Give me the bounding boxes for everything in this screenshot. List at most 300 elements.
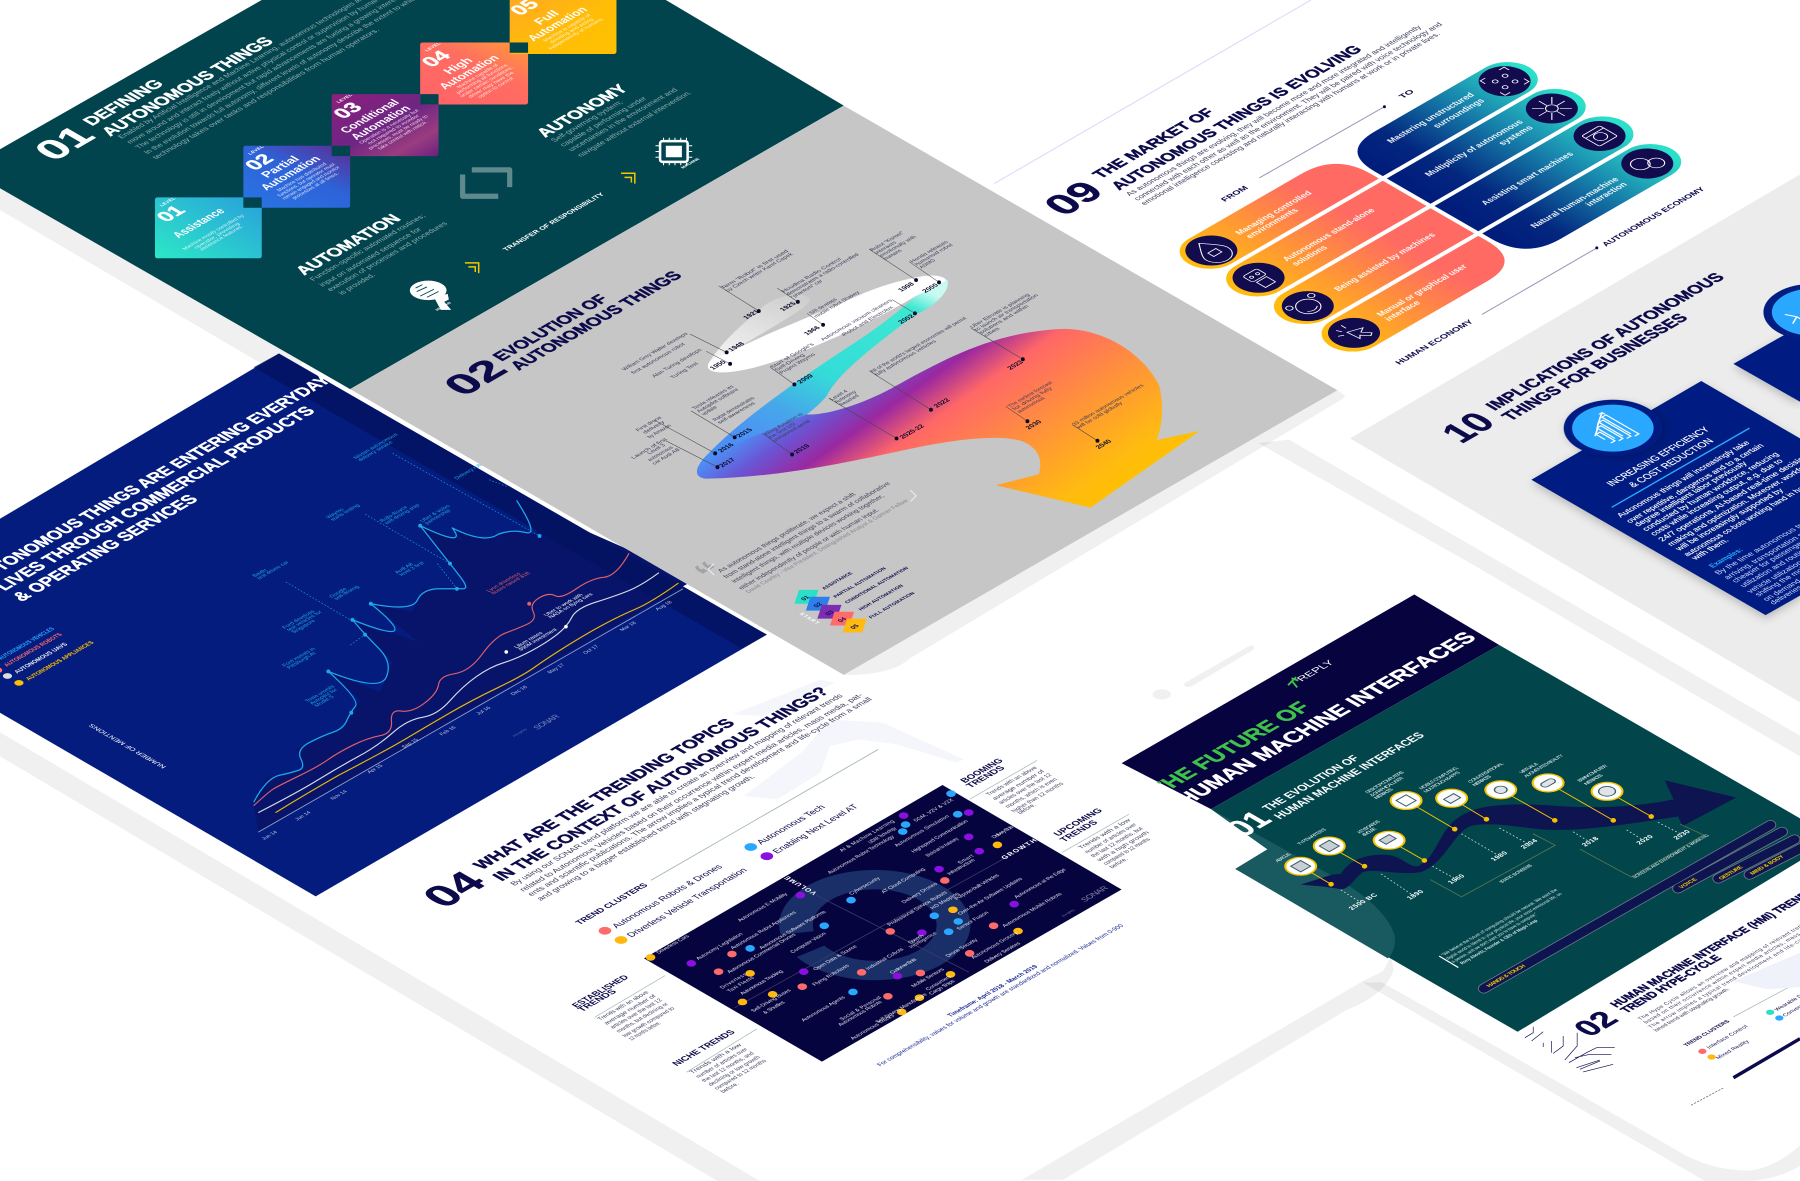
quadrant callouts: average number of (602, 994, 658, 1026)
card body text: costs while increasing output, e.g. due to (1648, 458, 1786, 537)
event annotations: Audi A8 (394, 562, 415, 575)
interface type labels: KEYBOARDS (1356, 819, 1383, 835)
trend labels: AI & Machine Learning (839, 819, 896, 853)
trend labels: Open Data & Source (812, 945, 859, 972)
quadrant callouts (570, 757, 1152, 1094)
event annotations: level 3 first (398, 561, 427, 577)
card: second implication (cropped) (1733, 272, 1800, 402)
interface type labels: VIRTUAL & (1518, 762, 1541, 775)
interface type labels: DESKTOP COMPUTERS (1364, 770, 1407, 795)
automation levels legend: CONDITIONAL AUTOMATION (844, 566, 911, 605)
section intro text: bined trend with stagnating growth. (1653, 987, 1732, 1033)
card body text: over repetitive, dangerous and to a certain (1624, 442, 1766, 524)
trend clusters legend: TREND CLUSTERS (573, 881, 650, 926)
curve: autonomous robots (254, 553, 629, 806)
icon: robot (1222, 257, 1295, 299)
interface icon circles (1279, 770, 1629, 879)
quadrant callouts: NICHE TRENDS (670, 1028, 737, 1067)
title: HUMAN MACHINE INTERFACES (1170, 628, 1482, 808)
timeline of interfaces drawn in zoom space (1274, 753, 1800, 989)
autonomy text block (531, 81, 694, 158)
card examples text: Examples: (1707, 547, 1745, 569)
trend labels: Purpose-built Vehicles (953, 873, 1001, 901)
event annotations: Uber & Volvo (419, 504, 452, 523)
level 03 conditional automation: Automation (347, 103, 414, 142)
trend labels: Driverless Cars (655, 934, 692, 955)
trend labels: Autonomous Simulation (894, 814, 951, 848)
quote: “We believe the future of computing should be natural. We want the (1440, 888, 1560, 957)
automation levels legend (794, 566, 917, 632)
level 02 partial automation (240, 145, 350, 208)
years on the timeline: 2004 (1520, 838, 1540, 850)
axis labels: GROWTH (1000, 838, 1039, 861)
section 01 number: 01 (25, 121, 104, 166)
trend clusters legend: Autonomous Tech (754, 803, 827, 846)
icon: human head (410, 281, 452, 312)
red and white annotations: Lyon driverless (486, 572, 523, 593)
interface type labels: AUGMENTED REALITY (1523, 753, 1566, 779)
faint arrow (1733, 953, 1800, 989)
level 04 high automation: under certain conditions; (459, 66, 515, 99)
timeline event descriptions: by Czech writer Karel Capek (724, 252, 795, 293)
level 01 assistance: 01 (152, 203, 191, 225)
timeline years (709, 282, 1114, 469)
quote: either independently of people or with human input. (737, 508, 882, 591)
lighter green device corner overlay (1211, 809, 1395, 958)
timeline years: 2020-22 (899, 424, 927, 440)
event annotations: Singapore (290, 619, 317, 635)
quadrant callouts: compared to 12 months (1102, 837, 1152, 866)
trend labels: Autonomous Agents (800, 995, 847, 1023)
trend labels: Driverless (719, 973, 749, 990)
automation levels legend: 01 (800, 595, 812, 602)
automation text block: execution of processes and procedures (325, 220, 450, 293)
time axis: Mar 18 (619, 621, 638, 632)
timeline event descriptions: Launch of first (630, 437, 670, 460)
icon: rising bars (1543, 388, 1682, 468)
timeline years: 2022 (933, 398, 952, 409)
timeline event descriptions: Level 3 (646, 443, 667, 455)
human economy to autonomous economy arrow: AUTONOMOUS ECONOMY (1600, 186, 1708, 248)
level 04 high automation: 04 (417, 48, 456, 70)
timeline event descriptions: emotionally with (878, 235, 918, 258)
interface icon glyphs (1291, 778, 1619, 872)
interface type labels: BRAIN-COMPUTER (1576, 764, 1610, 783)
timeline event descriptions: fully autonomous vehicles (874, 339, 939, 377)
era labels (1498, 833, 1711, 884)
trend labels: Smart (957, 854, 976, 865)
blue trend markers (745, 790, 963, 995)
timeline event descriptions: for driving fully (1011, 386, 1055, 411)
circuit decoration (1525, 1027, 1615, 1072)
event annotations: Baidu (251, 568, 269, 578)
level 02 partial automation: 02 (240, 151, 279, 174)
level 01 assistance: Assistance (169, 206, 228, 240)
timeline years: 2040 (1095, 439, 1114, 450)
section 10 heading: IMPLICATIONS OF AUTONOMOUS (1481, 270, 1729, 413)
timeline years: 2016 (717, 442, 736, 454)
trend labels: Professional Service Robots (886, 891, 949, 927)
trend clusters legend: Driverless Vehicle Transportation (624, 867, 749, 939)
quadrant callouts: Trends with an above (596, 990, 651, 1022)
timeline event descriptions: by Amazon (646, 424, 673, 439)
event annotations (251, 433, 491, 708)
level 04 high automation: option to control (477, 77, 516, 99)
section 09 heading: AUTONOMOUS THINGS IS EVOLVING (1107, 43, 1366, 193)
FROM to TO arrow (1219, 88, 1416, 203)
autonomy text block: AUTONOMY (531, 81, 633, 140)
from pill labels: Being assisted by machines (1332, 231, 1438, 293)
timeline event descriptions: Houdina Radio Control (781, 257, 843, 294)
quadrant callouts: articles over the last 12 (609, 997, 665, 1030)
automation levels legend: PARTIAL AUTOMATION (832, 567, 888, 599)
timeline years: 1948 (727, 341, 747, 353)
level 03 conditional automation: Conditional (337, 97, 403, 135)
section 02 number: 02 (1566, 1006, 1626, 1041)
timeline leader lines (654, 249, 1097, 467)
section 04 intro text: related to Autonomous Vehicles based on their occurrence within expert media articles, mass media, pat- (517, 692, 865, 893)
timeline event descriptions: cities (983, 327, 1002, 338)
event annotations: Ford develops (281, 609, 317, 630)
section 10 number: 10 (1433, 407, 1505, 449)
event annotations: Google (328, 587, 349, 599)
level 01 assistance: LEVEL (158, 196, 177, 207)
level 03 conditional automation: LEVEL (335, 93, 354, 104)
to pill labels: systems (1496, 124, 1535, 147)
automation text block (290, 211, 450, 296)
section 10 heading: THINGS FOR BUSINESSES (1497, 310, 1692, 423)
from pill labels: solutions (1289, 244, 1330, 267)
timeline years: 2002 (897, 314, 917, 325)
trend labels: Autonomous Software Platforms (758, 910, 828, 950)
section 01 heading: HUMAN MACHINE INTERFACES (1270, 730, 1428, 821)
to pill labels: Natural human-machine (1528, 176, 1621, 229)
timeline event descriptions: solutions and within (978, 304, 1031, 335)
event annotations: delivery service (357, 440, 395, 462)
curve: autonomous UAVs (258, 573, 659, 813)
trend labels: 5GM, V2V & V2X (913, 798, 956, 823)
panel: HMI trend hype-cycle (1525, 890, 1800, 1105)
time axis: May 17 (546, 663, 567, 675)
automation levels legend: START (797, 612, 821, 626)
quadrant callouts: TRENDS (964, 764, 1007, 789)
trend labels: Infrastructure (946, 858, 977, 876)
quadrant callouts: TRENDS (575, 988, 619, 1013)
level 01 assistance (152, 196, 262, 258)
level 04 high automation: LEVEL (424, 42, 442, 52)
section 02 number: 02 (434, 354, 517, 402)
card: increasing efficiency and cost reduction (1531, 381, 1800, 615)
trend labels: Delivery Drones (901, 882, 940, 904)
purple trend markers (687, 809, 1019, 979)
evolution ribbon arrow (697, 276, 1200, 508)
level 02 partial automation: remain engaged and monitor (281, 165, 342, 201)
quadrant callouts: UPCOMING (1051, 807, 1105, 838)
timeline event descriptions: iRobot and Electrolux (840, 305, 895, 337)
timeline event descriptions: Start of Google's (769, 342, 816, 369)
red and white annotations: Lilium raises (513, 631, 545, 649)
Sonar credit: Insights (512, 728, 528, 737)
curve: autonomous appliances (276, 583, 678, 813)
trend labels: Customer Bots (889, 958, 919, 975)
FROM to TO arrow: FROM (1219, 185, 1251, 203)
section 04 intro text: By using our SONAR trend platform we are able to create an overview and mapping of relevant trends (508, 693, 845, 887)
era labels: STATIC SCREENS (1498, 864, 1534, 884)
timeline years: 1950 (709, 360, 728, 371)
human economy to autonomous economy arrow: HUMAN ECONOMY (1393, 318, 1476, 366)
to pills (1340, 55, 1694, 259)
quadrant callouts: number of articles over (1083, 822, 1139, 855)
years on the timeline (1348, 829, 1692, 911)
autonomy text block: Self-governing system; (548, 99, 625, 143)
chart legend: AUTONOMOUS UAVS (13, 642, 70, 675)
quote: digital world to blend to your physical life, your most emotional life, so (1445, 892, 1564, 961)
hype cycle baseline (1733, 1039, 1800, 1078)
section 01 intro text: technology takes over tasks and responsibilities from human operators. (150, 27, 382, 161)
track labels: MIND & BODY (1749, 855, 1786, 876)
track labels: VOICE (1678, 878, 1699, 890)
quote: a person, and we don't want you to have to compute.” (1450, 912, 1540, 964)
decorative purple rule above section 09 (994, 0, 1311, 184)
section 01 heading: DEFINING (78, 76, 168, 128)
trend labels: Computer Vision (789, 932, 828, 954)
to pill labels (1384, 91, 1629, 229)
timeline event descriptions: ASIMO (918, 258, 938, 270)
from/to pills matrix (1167, 55, 1694, 359)
interface type labels: ABACUS (1274, 852, 1294, 863)
automation text block: Function-specific automated routines; (307, 213, 427, 282)
timeline years: 1966 (803, 325, 822, 337)
icon: transfer brackets (463, 170, 510, 196)
interface type labels: CONVERSATIONAL (1467, 762, 1506, 784)
panel: section 10 implications for businesses (1350, 174, 1800, 702)
trend labels: Blockchain for Autonomy (925, 837, 961, 858)
timeline event descriptions: humans (883, 249, 904, 261)
quadrant callouts: with a high growth (1094, 830, 1152, 863)
quadrant callouts: Trends with a low (1077, 818, 1133, 850)
time axis: Dec 16 (510, 685, 529, 697)
timeline event descriptions: Project Waymo (778, 353, 817, 375)
panel: section 02 evolution of autonomous things (350, 106, 1337, 675)
level 02 partial automation: Machine has distributed (276, 162, 329, 193)
event markers and leader lines (286, 453, 568, 715)
quadrant callouts: articles over the last 12 (997, 772, 1054, 805)
arrow: yellow chevrons near human (465, 263, 479, 273)
quadrant callouts: low growth compared to (621, 1006, 677, 1038)
timeline event descriptions: Tesla releases its (691, 385, 736, 411)
quadrant callouts: TRENDS (1057, 819, 1100, 843)
timeline event descriptions: Uber Elevate is planning (969, 293, 1032, 329)
quote: Rony Abovitz, Founder & CEO of Magic Leap (1459, 919, 1540, 965)
trend labels: HD Mapping (929, 892, 961, 910)
trend labels: Drone Security (945, 938, 980, 958)
time axis: Oct 17 (582, 644, 601, 655)
timeline years: 2030 (1025, 419, 1044, 431)
trend cluster legend: Mixed Reality (1715, 1039, 1751, 1060)
timeline years: 2009 (796, 373, 816, 385)
trend labels: Autonomous at the Edge (1013, 868, 1068, 899)
trend labels: Autonomous Robot Appliances (729, 911, 798, 950)
event annotations: Waymo (325, 508, 346, 520)
icon: multiplicity hub (1515, 87, 1589, 130)
transfer of responsibility label: TRANSFER OF RESPONSIBILITY (502, 192, 607, 252)
years on the timeline: 1960 (1447, 874, 1467, 885)
panel: future of human machine interfaces (1122, 595, 1800, 1032)
panel: section 04 trending topics (412, 679, 1152, 1094)
section 09 number: 09 (1035, 176, 1114, 221)
timeline event descriptions: 33 million autonomous vehicles (1071, 384, 1146, 427)
timeline years: 2000 (921, 283, 941, 294)
interaction tracks (1484, 825, 1800, 989)
trend clusters legend (573, 749, 878, 944)
automation text block: is provided. (336, 272, 378, 296)
faint background arrow (733, 679, 964, 799)
years on the timeline: 2020 (1635, 834, 1655, 846)
ribbon tail (709, 295, 810, 363)
red and white annotations: NASA on flying cars (548, 592, 595, 620)
level 03 conditional automation: Operation is a necessity but (358, 108, 421, 145)
FROM to TO arrow: TO (1397, 88, 1416, 100)
curve: autonomous vehicles (254, 500, 531, 802)
red and white annotations: buses raised $1B (490, 571, 532, 596)
event annotations: Pittsburgh AI (286, 651, 318, 670)
trend cluster legend: TREND CLUSTERS (1683, 1019, 1732, 1048)
timeline event descriptions: interacts (874, 241, 899, 255)
quadrant callouts: before. (719, 1081, 741, 1094)
interface type labels: & MOUSE (1361, 827, 1379, 837)
era labels: SCREENS AND ENVIRONMENT & WORKING (1631, 833, 1711, 879)
level 05 full automation: Automation (524, 5, 591, 43)
timeline event descriptions: self-awareness (716, 401, 758, 425)
trend labels: Taxi Fleets (726, 976, 756, 993)
quadrant callouts: Trends with an above (984, 765, 1040, 797)
section 01 heading: AUTONOMOUS THINGS (96, 34, 278, 139)
automation text block: input on automated sequence for (317, 226, 424, 288)
time axis: Jun 14 (294, 811, 313, 822)
section 09 intro text: emotional intelligence coexisting and naturally interacting with humans at work or in private lives. (1138, 31, 1442, 206)
event annotations: Ford invests in (281, 647, 317, 668)
timeline years: 1998 (897, 282, 917, 293)
level 04 high automation: performing all functions (455, 63, 510, 95)
chart legend: AUTONOMOUS APPLIANCES (24, 640, 97, 682)
level 04 high automation (417, 42, 528, 104)
years on the timeline: 1890 (1406, 889, 1426, 901)
section 04 intro text: and growing to a bigger established trend with stagnating growth. (535, 774, 757, 902)
card heading: & COST REDUCTION (1627, 437, 1717, 489)
trend clusters legend: Autonomous Robots & Drones (610, 863, 725, 930)
section 04 number: 04 (412, 865, 496, 913)
timeframe note: Timeframe: April 2018 - March 2019 (946, 964, 1040, 1018)
card body text: will be increasingly supported by (1673, 487, 1786, 552)
timeline event descriptions: Robot demonstrates (712, 396, 757, 422)
timeline years: 2023 (1006, 360, 1026, 371)
timeline event descriptions: the first US (767, 422, 798, 440)
level 04 high automation: driver may have the (467, 71, 516, 99)
trend labels: & Shuttles (762, 1000, 787, 1015)
quote: intelligent things, with multiple devices working together, (730, 494, 887, 584)
axis labels (783, 838, 1039, 895)
timeline event descriptions: will be sold globally (1075, 401, 1125, 430)
to pill labels: interaction (1583, 181, 1629, 208)
quadrant callouts: the last 12 months, and (700, 1051, 757, 1083)
level 04 high automation: Machine capable of (455, 63, 501, 89)
title: THE FUTURE OF (1143, 698, 1316, 798)
event annotations: partnership (424, 509, 453, 526)
years on the timeline: 2030 (1672, 829, 1692, 841)
interface type labels: MOBILE COMPUTING, (1418, 766, 1461, 791)
to pill labels: Mastering unstructured (1384, 91, 1477, 144)
quadrant callouts: before. (1016, 802, 1038, 815)
yellow trend markers (646, 842, 1023, 1015)
from pill labels: interface (1382, 299, 1423, 322)
chart title: & OPERATING SERVICES (8, 492, 202, 604)
timeline event descriptions: “phantom” car (790, 279, 825, 299)
card body text: with them. (1689, 537, 1731, 562)
from pill labels: Manual or graphical user (1374, 263, 1470, 318)
event annotations: Nissan autonomous (352, 433, 400, 460)
icon: human head: HUMAN (434, 301, 452, 312)
Reply logo: REPLY (1295, 659, 1338, 683)
timeline event descriptions: The earliest forecast (1007, 381, 1055, 408)
event annotations: starts testing (329, 503, 362, 522)
Reply logo (1288, 659, 1338, 687)
icon: droplet (1175, 229, 1248, 272)
trend labels: Autonomous Grocery (970, 931, 1020, 960)
level 02 partial automation: LEVEL (247, 145, 265, 155)
timeline event descriptions: Alan Turing develops (651, 348, 704, 379)
icon: smart washing machine (1563, 115, 1636, 157)
timeline event descriptions: first autonomous robot (630, 342, 688, 375)
interface type labels: & GRAPHICAL USER (1369, 776, 1406, 798)
Sonar credit (1060, 885, 1111, 918)
level 04 high automation: High (440, 55, 476, 76)
quadrant callouts: the last 12 months, but (1089, 826, 1145, 859)
level 05 full automation: Full (530, 8, 562, 27)
axis labels: VOLUME (783, 875, 819, 895)
level 05 full automation: independently of humans. (547, 17, 606, 51)
Sonar credit: Insights (1060, 908, 1076, 918)
timeline event descriptions: demonstrates a radio-controlled (785, 253, 861, 297)
axes (735, 842, 1033, 1008)
quadrant callouts: Trends with a low (688, 1042, 744, 1075)
level 03 conditional automation: not required to monitor (367, 114, 422, 146)
level 05 full automation: Machine is capable of (542, 13, 593, 43)
level 01 assistance: operator, providing (193, 222, 242, 250)
level 05 full automation: deciding and acting (548, 17, 595, 45)
level 02 partial automation: Partial (258, 154, 303, 180)
dark area under curves (254, 500, 689, 832)
autonomy text block: uncertainties in the environment and (566, 87, 680, 152)
timeline event descriptions (621, 231, 1146, 466)
level 03 conditional automation: take control with notice. (377, 120, 430, 151)
red trend markers (714, 877, 998, 1000)
trend labels: Sensor Fusion (956, 911, 991, 931)
timeline years: 1925 (779, 301, 798, 312)
trend labels: Cybersecurity (848, 876, 882, 896)
timeline event descriptions: delivery (642, 420, 667, 435)
chart title: LIVES THROUGH COMMERCIAL PRODUCTS (0, 403, 319, 593)
event annotations: self-driving ship (383, 503, 422, 526)
human economy to autonomous economy arrow (1393, 186, 1708, 366)
trend labels: Cargo Ships (928, 979, 957, 996)
section heading: TREND HYPE-CYCLE (1617, 953, 1725, 1015)
trend labels: Delivery Bots (991, 825, 1016, 840)
timeline event descriptions: Robot “Kismet” (869, 231, 906, 252)
event annotations: self-driving (333, 585, 361, 601)
trend labels: Autonomous Robots (837, 1000, 884, 1027)
timeline event descriptions: Reached (838, 394, 861, 407)
icon: surroundings scan (1468, 60, 1541, 102)
